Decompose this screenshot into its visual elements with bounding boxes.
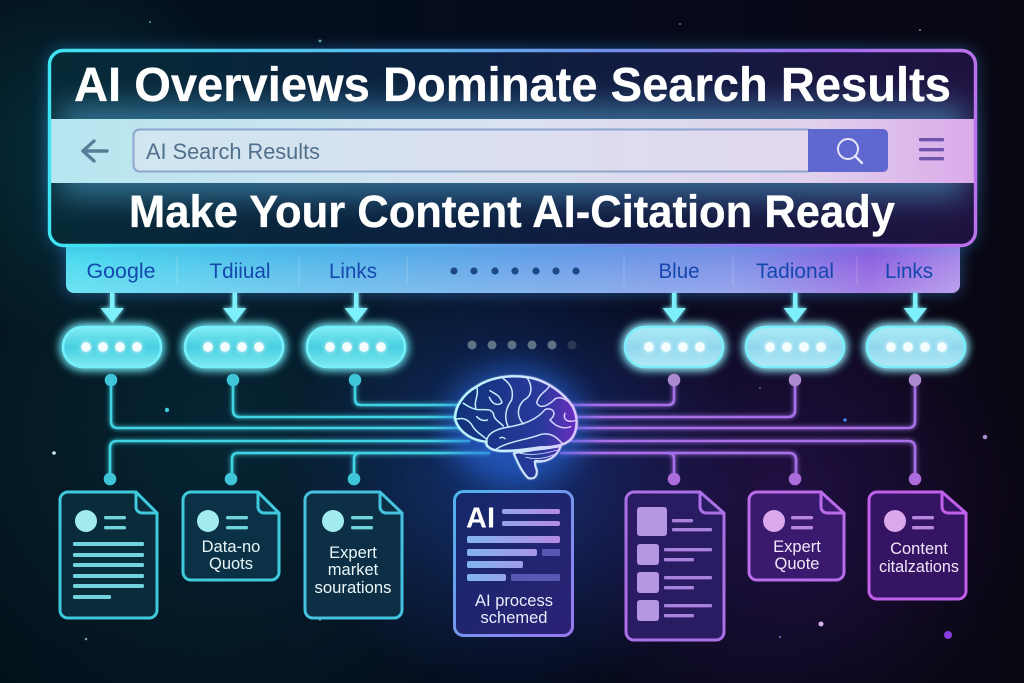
connector lines: pills and documents to brain	[110, 380, 915, 479]
document 6: Expert Quote	[749, 492, 844, 580]
subtitle: Make Your Content AI-Citation Ready	[129, 186, 895, 237]
tab labels: Links	[329, 260, 377, 283]
middle grey dots	[468, 340, 576, 350]
document 4: AI process schemed: AI	[466, 502, 495, 534]
search button with magnifier icon	[808, 129, 888, 172]
tab labels	[86, 260, 933, 283]
document 5: list with thumbnails	[626, 492, 724, 640]
brain folds	[456, 378, 575, 462]
main search panel	[48, 49, 977, 247]
icon: hamburger menu	[919, 138, 944, 160]
icon: back arrow	[83, 141, 107, 161]
document 3: Expert market sourations: market	[328, 561, 379, 579]
document 3: Expert market sourations: Expert	[329, 544, 377, 562]
browser search band	[51, 119, 974, 183]
tab labels: Blue	[658, 260, 700, 283]
tab bar dots	[450, 267, 580, 275]
tab labels: Google	[86, 260, 156, 283]
pill dots	[81, 342, 947, 352]
document 7: Content citalzations	[869, 492, 966, 599]
document 2: Data-no Quots	[183, 492, 279, 580]
document 6: Expert Quote: Expert	[773, 538, 821, 556]
tab bar: traditional links strip	[66, 240, 960, 293]
tab labels: Tadional	[756, 260, 834, 283]
document 3: Expert market sourations	[305, 492, 402, 618]
connector nodes	[104, 374, 921, 485]
document 4: AI process schemed	[454, 492, 572, 636]
arrows from tabs to pills	[100, 293, 927, 323]
document 4: AI process schemed: schemed	[481, 609, 547, 627]
document 6: Expert Quote: Quote	[775, 555, 819, 573]
title: AI Overviews Dominate Search Results	[74, 59, 951, 112]
search input	[134, 130, 814, 172]
icon: glowing brain	[446, 367, 586, 483]
result pills row	[63, 327, 965, 367]
tab labels: Tdiiual	[210, 260, 270, 283]
document 2: Data-no Quots: Data-no	[202, 538, 260, 556]
document 7: Content citalzations: citalzations	[879, 558, 959, 576]
document 4: AI process schemed: AI process	[475, 592, 553, 610]
document 1: article lines	[60, 492, 157, 618]
document 3: Expert market sourations: sourations	[314, 579, 392, 597]
document 2: Data-no Quots: Quots	[209, 555, 253, 573]
document 7: Content citalzations: Content	[890, 540, 948, 558]
search input: AI Search Results	[146, 139, 320, 164]
tab labels: Links	[885, 260, 933, 283]
